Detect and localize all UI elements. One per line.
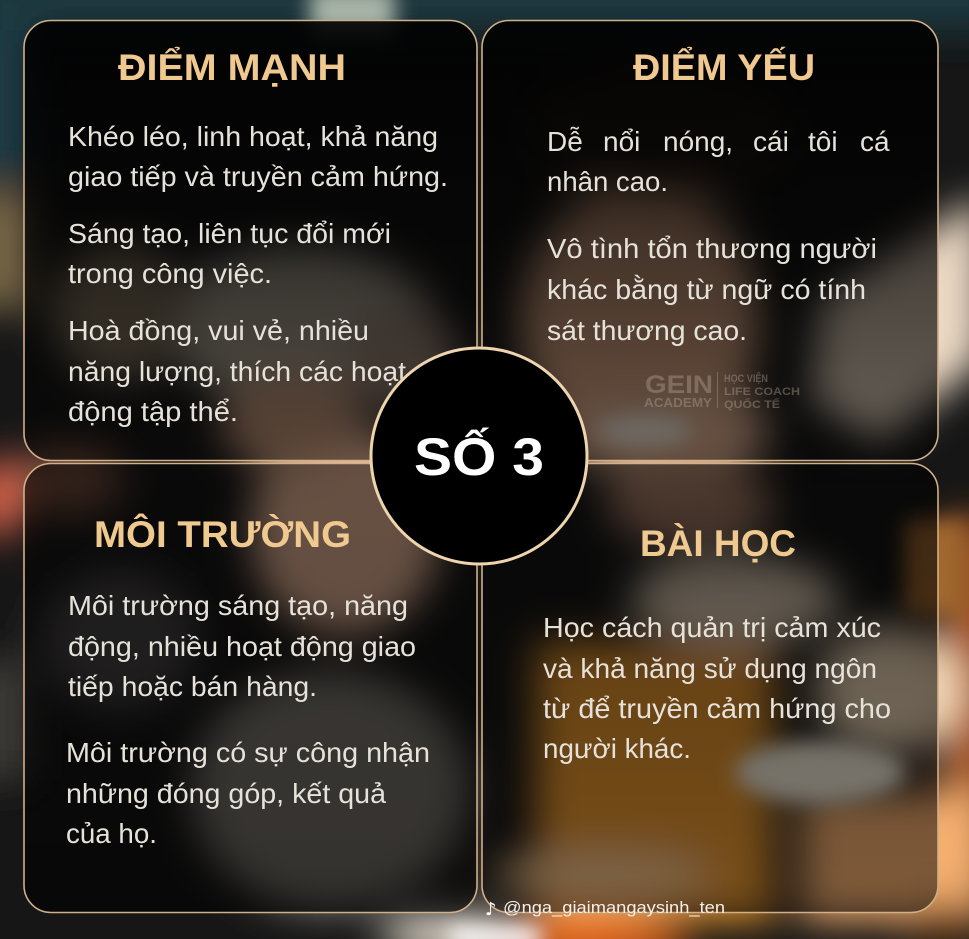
heading: điểm mạnh: ĐIỂM MẠNH: [118, 46, 346, 88]
panel: bài học: [482, 464, 938, 912]
watermark: gein academy: [644, 371, 800, 411]
watermark: gein academy: QUỐC TẾ: [724, 397, 780, 411]
center badge: số 3: SỐ 3: [414, 427, 544, 487]
text block: environment 1: động, nhiều hoạt động giao: [68, 631, 416, 662]
text block: strengths 3: động tập thể.: [68, 396, 238, 427]
text block: lesson: người khác.: [543, 733, 691, 764]
text block: weakness 2: Vô tình tổn thương người: [547, 233, 877, 264]
heading: môi trường: MÔI TRƯỜNG: [94, 513, 351, 555]
heading: bài học: BÀI HỌC: [640, 523, 796, 564]
text block: strengths 3: Hoà đồng, vui vẻ, nhiều: [68, 315, 369, 346]
text block: weakness 1: nóng,: [663, 126, 733, 157]
watermark: gein academy: HỌC VIỆN: [724, 372, 768, 385]
text block: weakness 1: Dễ: [547, 126, 583, 157]
panel: điểm yếu: [482, 20, 938, 460]
text block: lesson: Học cách quản trị cảm xúc: [543, 612, 881, 643]
text block: weakness 1: cái: [753, 126, 789, 157]
text block: lesson: và khả năng sử dụng ngôn: [543, 653, 877, 684]
tiktok handle: @nga_giaimangaysinh_ten: [503, 898, 725, 917]
text block: weakness 1: nhân cao.: [547, 166, 668, 197]
watermark: gein academy: LIFE COACH: [724, 386, 800, 398]
text block: environment 1: [68, 590, 416, 702]
text block: lesson: từ để truyền cảm hứng cho: [543, 693, 891, 724]
text block: environment 2: Môi trường có sự công nhận: [66, 737, 430, 768]
text block: weakness 1: [547, 126, 890, 197]
icon: tiktok note: ♪: [485, 899, 496, 920]
text block: strengths 2: Sáng tạo, liên tục đổi mới: [68, 218, 391, 249]
text block: weakness 1: tôi: [808, 126, 838, 157]
text block: environment 1: Môi trường sáng tạo, năng: [68, 590, 408, 621]
text block: environment 2: của họ.: [66, 818, 157, 849]
text block: strengths 1: giao tiếp và truyền cảm hứng.: [68, 161, 448, 192]
text block: weakness 2: sát thương cao.: [547, 315, 747, 346]
text block: environment 1: tiếp hoặc bán hàng.: [68, 671, 317, 702]
text block: weakness 1: nổi: [603, 126, 640, 157]
text block: strengths 3: [68, 315, 406, 427]
text block: lesson: [543, 612, 891, 764]
text block: weakness 2: khác bằng từ ngữ có tính: [547, 274, 866, 305]
panel: môi trường: [24, 464, 477, 912]
watermark: gein academy: ACADEMY: [644, 395, 712, 410]
text block: strengths 1: Khéo léo, linh hoạt, khả năng: [68, 121, 438, 152]
text block: environment 2: những đóng góp, kết quả: [66, 778, 386, 809]
text block: weakness 1: cá: [860, 126, 890, 157]
watermark: gein academy: GEIN: [645, 371, 713, 399]
text block: strengths 3: năng lượng, thích các hoạt: [68, 356, 406, 387]
panel: điểm mạnh: [24, 20, 477, 460]
text block: strengths 2: trong công việc.: [68, 258, 272, 289]
text block: strengths 2: [68, 218, 391, 289]
text block: weakness 2: [547, 233, 877, 346]
heading: điểm yếu: ĐIỂM YẾU: [633, 46, 815, 88]
text block: environment 2: [66, 737, 430, 849]
text block: strengths 1: [68, 121, 448, 192]
center badge: số 3: [371, 348, 587, 564]
